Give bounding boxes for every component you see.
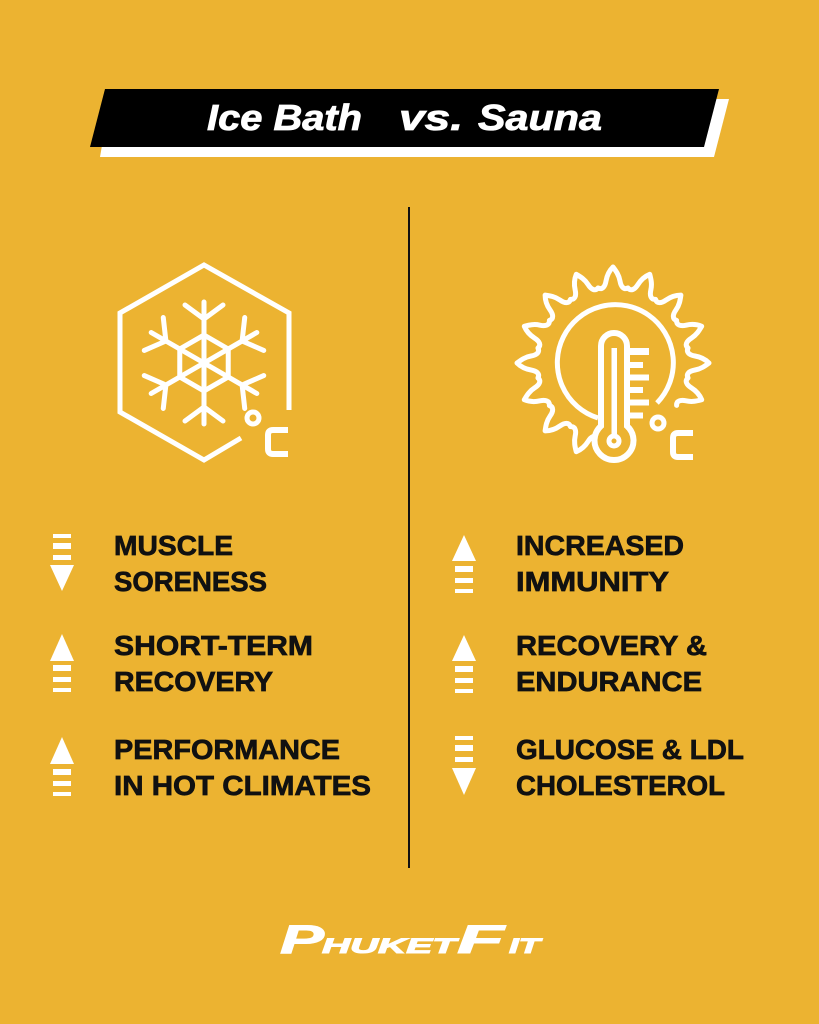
- label: [114, 530, 267, 597]
- arrow up: [50, 737, 74, 796]
- label: [516, 734, 744, 801]
- item: short-term recovery up: [50, 630, 313, 697]
- arrow down: [50, 534, 74, 591]
- arrow up: [452, 535, 476, 593]
- logo: PhuketFit: P: [280, 918, 325, 962]
- label: [114, 734, 371, 801]
- icon: sun with thermometer and degrees Celsius: [517, 267, 709, 460]
- label: ENDURANCE: [516, 666, 702, 697]
- label: RECOVERY: [114, 666, 273, 697]
- logo: PhuketFit: HUKET: [322, 935, 460, 958]
- arrow down: [452, 736, 476, 795]
- title banner: [90, 89, 729, 157]
- title: vs.: vs.: [399, 97, 463, 138]
- label: IN HOT CLIMATES: [114, 770, 371, 801]
- arrow up: [452, 635, 476, 693]
- arrow up: [50, 634, 74, 692]
- label: CHOLESTEROL: [516, 770, 725, 801]
- logo: PhuketFit: IT: [509, 935, 544, 958]
- label: [516, 630, 707, 697]
- label: PERFORMANCE: [114, 734, 340, 765]
- label: RECOVERY &: [516, 630, 707, 661]
- item: increased immunity up: [452, 530, 684, 597]
- label: [114, 630, 313, 697]
- label: SHORT-TERM: [114, 630, 313, 661]
- label: IMMUNITY: [516, 566, 669, 597]
- icon: snowflake in hexagon with degrees Celsius: [120, 265, 289, 460]
- item: muscle soreness down: [50, 530, 267, 597]
- title: Sauna: Sauna: [478, 97, 602, 138]
- logo: PhuketFit: [280, 918, 544, 962]
- label: INCREASED: [516, 530, 684, 561]
- item: recovery and endurance up: [452, 630, 707, 697]
- label: GLUCOSE & LDL: [516, 734, 744, 765]
- label: SORENESS: [114, 566, 267, 597]
- label: MUSCLE: [114, 530, 233, 561]
- title: Ice Bath: Ice Bath: [207, 97, 362, 138]
- item: performance in hot climates up: [50, 734, 371, 801]
- label: [516, 530, 684, 597]
- logo: PhuketFit: F: [457, 918, 507, 962]
- item: glucose and LDL cholesterol down: [452, 734, 744, 801]
